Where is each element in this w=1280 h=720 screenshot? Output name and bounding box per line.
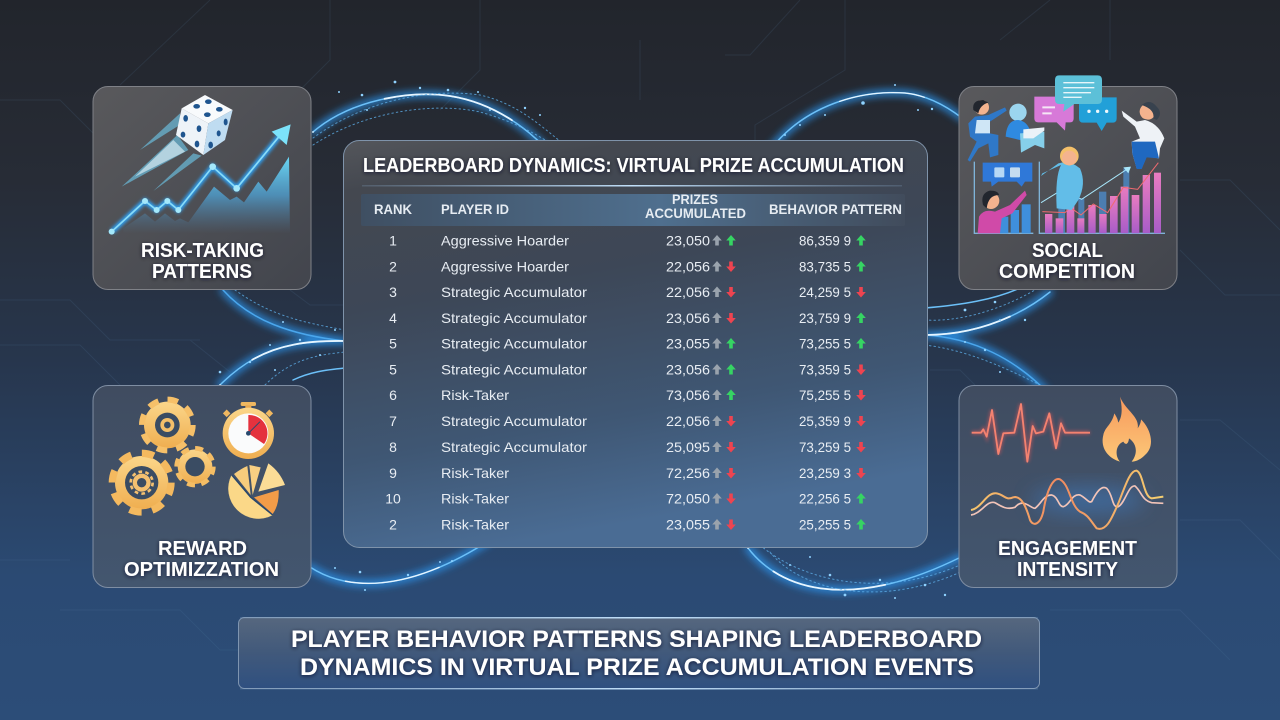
row 2: Aggressive Hoarder xyxy=(441,258,569,274)
panel: reward optimization xyxy=(93,386,311,588)
label: social competition xyxy=(999,240,1135,283)
row 3: 22,056 xyxy=(666,284,710,300)
banner heading xyxy=(291,626,982,681)
banner heading: DYNAMICS IN VIRTUAL PRIZE ACCUMULATION EVENTS xyxy=(300,654,974,681)
row 3: Strategic Accumulator xyxy=(441,284,587,300)
table header xyxy=(361,192,905,226)
row 5: 5 xyxy=(389,336,397,352)
row 6: Strategic Accumulator xyxy=(441,362,587,378)
row 1 xyxy=(389,232,866,248)
label: social competition: SOCIAL xyxy=(1032,240,1103,262)
row 1: Aggressive Hoarder xyxy=(441,232,569,248)
row 11: 10 xyxy=(385,490,401,506)
row 4: 23,056 xyxy=(666,310,710,326)
table header: RANK xyxy=(374,202,412,217)
row 7: 75,255 5 xyxy=(799,387,851,403)
row 11: Risk-Taker xyxy=(441,490,509,506)
label: engagement intensity: ENGAGEMENT xyxy=(998,538,1137,560)
row 6: 73,359 5 xyxy=(799,362,851,378)
row 4: Strategic Accumulator xyxy=(441,310,587,326)
row 12 xyxy=(389,516,866,532)
row 4: 23,759 9 xyxy=(799,310,851,326)
label: engagement intensity: INTENSITY xyxy=(1017,559,1119,581)
row 12: 2 xyxy=(389,516,397,532)
row 12: 25,255 5 xyxy=(799,516,851,532)
table rows xyxy=(385,232,866,532)
row 6: 5 xyxy=(389,362,397,378)
table title: LEADERBOARD DYNAMICS: VIRTUAL PRIZE ACCUMULATION xyxy=(363,155,904,177)
row 5 xyxy=(389,336,866,352)
row 11: 22,256 5 xyxy=(799,490,851,506)
row 5: 73,255 5 xyxy=(799,336,851,352)
glow arcs xyxy=(220,93,1050,592)
table header: ACCUMULATED xyxy=(645,206,746,221)
panel: risk-taking patterns xyxy=(93,86,311,290)
row 2: 2 xyxy=(389,258,397,274)
bottom title banner xyxy=(238,617,1040,690)
panel: engagement intensity xyxy=(959,386,1177,588)
row 6 xyxy=(389,362,866,378)
row 9: 8 xyxy=(389,439,397,455)
row 2: 83,735 5 xyxy=(799,258,851,274)
icon: people, chat bubbles and bars xyxy=(968,75,1165,233)
row 6: 23,056 xyxy=(666,362,710,378)
row 11 xyxy=(385,490,866,506)
banner heading: PLAYER BEHAVIOR PATTERNS SHAPING LEADERBOARD xyxy=(291,626,982,653)
row 8: Strategic Accumulator xyxy=(441,413,587,429)
row 9 xyxy=(389,439,866,455)
row 10: 23,259 3 xyxy=(799,465,851,481)
table header: PLAYER ID xyxy=(441,202,509,217)
row 4 xyxy=(389,310,866,326)
panel: social competition xyxy=(959,75,1177,290)
icon: gears, stopwatch and pie chart xyxy=(112,400,285,519)
row 5: 23,055 xyxy=(666,336,710,352)
row 1: 23,050 xyxy=(666,232,710,248)
row 2 xyxy=(389,258,866,274)
table header: BEHAVIOR PATTERN xyxy=(769,202,902,217)
row 7: 73,056 xyxy=(666,387,710,403)
label: engagement intensity xyxy=(998,538,1137,581)
row 4: 4 xyxy=(389,310,397,326)
label: reward optimization: REWARD xyxy=(158,538,247,560)
row 11: 72,050 xyxy=(666,490,710,506)
label: reward optimization: OPTIMIZZATION xyxy=(124,559,279,581)
sparkles xyxy=(219,81,1026,599)
row 10: Risk-Taker xyxy=(441,465,509,481)
row 8: 22,056 xyxy=(666,413,710,429)
icon: dice and rising chart xyxy=(109,95,291,235)
glints over panel edges xyxy=(343,308,927,368)
label: risk-taking patterns: RISK-TAKING xyxy=(141,240,264,262)
label: social competition: COMPETITION xyxy=(999,261,1135,283)
row 8: 25,359 9 xyxy=(799,413,851,429)
row 9: 25,095 xyxy=(666,439,710,455)
row 7: Risk-Taker xyxy=(441,387,509,403)
row 8 xyxy=(389,413,866,429)
row 3: 3 xyxy=(389,284,397,300)
row 10: 72,256 xyxy=(666,465,710,481)
row 7: 6 xyxy=(389,387,397,403)
row 8: 7 xyxy=(389,413,397,429)
row 10: 9 xyxy=(389,465,397,481)
row 7 xyxy=(389,387,866,403)
row 12: Risk-Taker xyxy=(441,516,509,532)
label: risk-taking patterns: PATTERNS xyxy=(152,261,252,283)
label: reward optimization xyxy=(124,538,279,581)
row 9: 73,259 5 xyxy=(799,439,851,455)
icon: heartbeat, flame and waves xyxy=(971,397,1163,529)
table header: PRIZES xyxy=(672,192,718,207)
label: risk-taking patterns xyxy=(141,240,264,283)
row 2: 22,056 xyxy=(666,258,710,274)
row 9: Strategic Accumulator xyxy=(441,439,587,455)
row 5: Strategic Accumulator xyxy=(441,336,587,352)
row 10 xyxy=(389,465,866,481)
row 3 xyxy=(389,284,866,300)
row 3: 24,259 5 xyxy=(799,284,851,300)
row 12: 23,055 xyxy=(666,516,710,532)
panel: leaderboard table xyxy=(344,140,928,548)
row 1: 1 xyxy=(389,232,397,248)
row 1: 86,359 9 xyxy=(799,232,851,248)
